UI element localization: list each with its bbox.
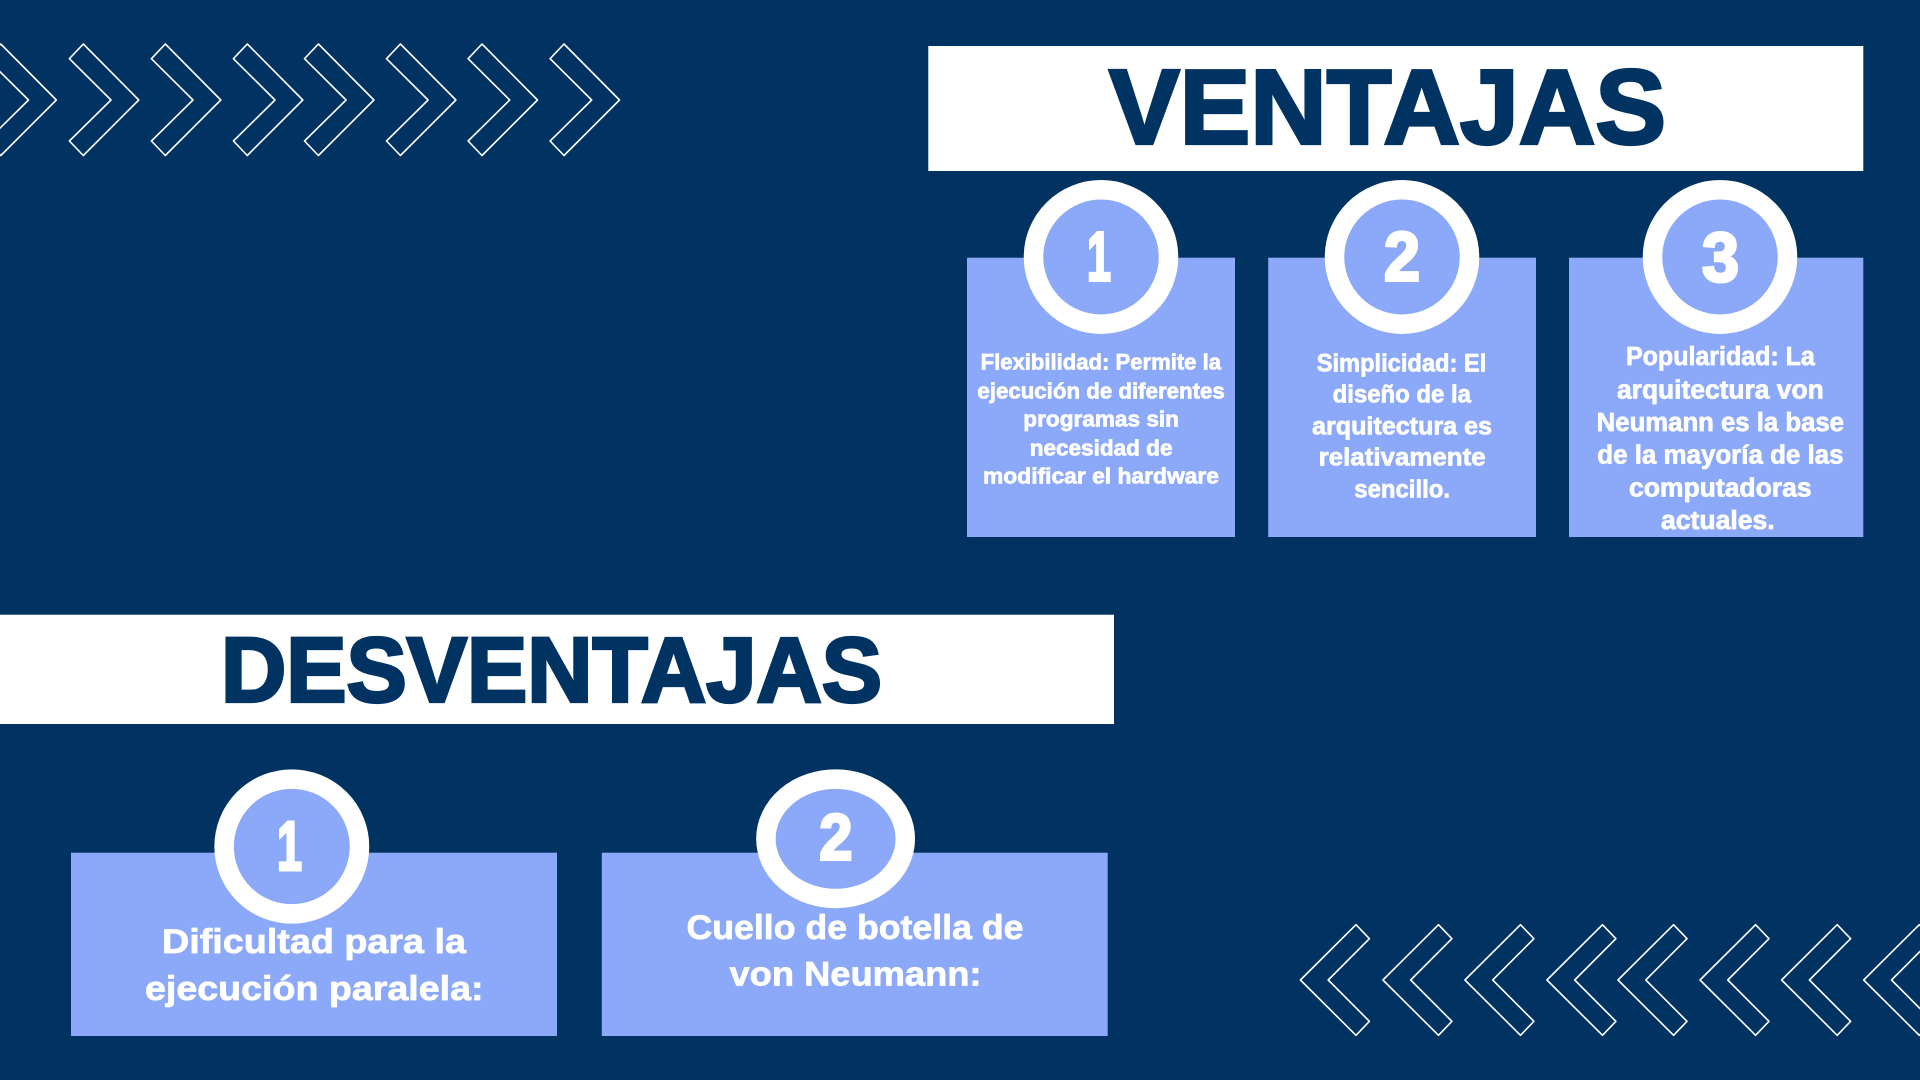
heading banner: DESVENTAJAS xyxy=(0,615,1114,724)
panel: ventaja 3: actuales. xyxy=(1661,507,1775,535)
panel: ventaja 1: ejecución de diferentes xyxy=(977,378,1225,403)
panel: ventaja 3 xyxy=(1569,190,1863,537)
panel: ventaja 2 xyxy=(1268,190,1536,537)
panel: ventaja 1 xyxy=(967,190,1235,537)
panel: ventaja 1: Flexibilidad: Permite la xyxy=(981,350,1221,375)
panel: ventaja 1: programas sin xyxy=(1023,407,1179,432)
heading banner: DESVENTAJAS: DESVENTAJAS xyxy=(221,619,882,721)
panel: ventaja 3: computadoras xyxy=(1629,474,1812,502)
panel: ventaja 2: relativamente xyxy=(1319,443,1486,471)
panel: ventaja 2: arquitectura es xyxy=(1312,412,1492,440)
panel: ventaja 1: 1 xyxy=(1087,218,1111,296)
panel: ventaja 1: modificar el hardware xyxy=(983,463,1219,488)
panel: ventaja 3: Popularidad: La xyxy=(1626,343,1816,371)
panel: ventaja 3: 3 xyxy=(1702,218,1739,296)
panel: desventaja 2: von Neumann: xyxy=(730,956,982,994)
panel: ventaja 2: 2 xyxy=(1384,218,1420,296)
panel: ventaja 3: de la mayoría de las xyxy=(1597,442,1844,470)
panel: ventaja 2: sencillo. xyxy=(1354,475,1450,503)
heading banner: VENTAJAS xyxy=(928,46,1863,171)
panel: desventaja 2: Cuello de botella de xyxy=(686,909,1024,947)
decorative chevrons: bottom right xyxy=(1300,925,1920,1035)
panel: ventaja 1: necesidad de xyxy=(1030,435,1172,460)
panel: ventaja 2: diseño de la xyxy=(1333,380,1472,408)
decorative chevrons: top left xyxy=(0,44,619,156)
panel: desventaja 1: ejecución paralela: xyxy=(145,970,484,1008)
panel: desventaja 2: 2 xyxy=(819,800,852,873)
panel: ventaja 2: Simplicidad: El xyxy=(1317,349,1486,377)
panel: desventaja 1: Dificultad para la xyxy=(162,923,467,961)
panel: desventaja 2 xyxy=(602,779,1108,1036)
heading banner: VENTAJAS: VENTAJAS xyxy=(1109,48,1666,166)
panel: ventaja 3: Neumann es la base xyxy=(1597,409,1844,437)
panel: ventaja 3: arquitectura von xyxy=(1617,376,1824,404)
panel: desventaja 1: 1 xyxy=(277,807,302,885)
panel: desventaja 1 xyxy=(71,779,557,1036)
